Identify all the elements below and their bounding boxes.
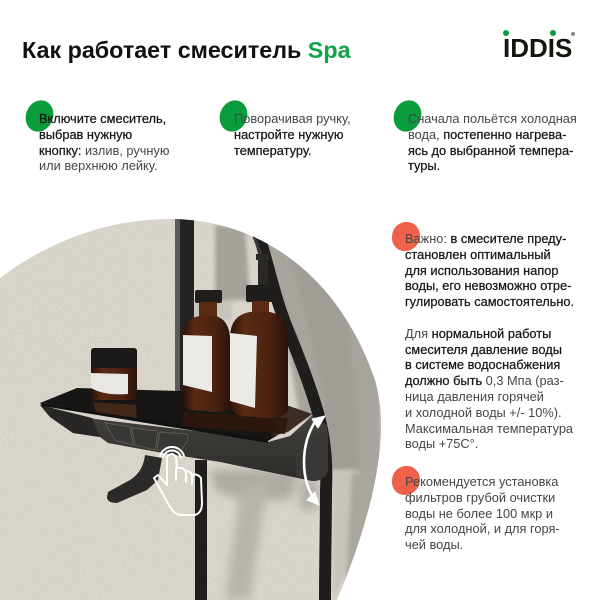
jar — [91, 348, 137, 400]
icon: pressing hand — [154, 447, 202, 515]
text: filters: Рекомендуется установка — [405, 474, 558, 489]
text: important: Максимальная температура — [405, 421, 573, 436]
mixer buttons — [105, 423, 188, 452]
text: filters: чей воды. — [405, 537, 463, 552]
text: important: воды, его невозможно отре- — [405, 278, 571, 293]
marker: green blob — [215, 96, 252, 136]
mixer body — [40, 403, 328, 481]
bottle 2 pump — [246, 260, 272, 302]
step 2 — [220, 100, 351, 158]
text: important: Для нормальной работы — [405, 326, 551, 341]
text: step 3: туры. — [408, 158, 440, 173]
text: important: для использования напор — [405, 263, 559, 278]
marker: green blob — [21, 96, 58, 136]
text: filters: воды не более 100 мкр и — [405, 506, 553, 521]
text: step 3: ясь до выбранной темпера- — [408, 143, 573, 158]
note: important — [392, 222, 574, 451]
text: filters: для холодной, и для горя- — [405, 521, 560, 536]
arrow: handle rotation — [304, 416, 325, 505]
text: important: Важно: в смесителе преду- — [405, 231, 566, 246]
title: Как работает смеситель Spa — [22, 37, 351, 63]
text: important: и холодной воды +/- 10%). — [405, 405, 562, 420]
text: step 1: Включите смеситель, — [39, 111, 166, 126]
text: important: ница давления горячей — [405, 389, 544, 404]
text: important: гулировать самостоятельно. — [405, 294, 574, 309]
photo: shower mixer in a circular crop — [0, 219, 381, 600]
text: step 1: или верхнюю лейку. — [39, 158, 157, 173]
text: important: воды +75С°. — [405, 436, 478, 451]
lower pole — [195, 460, 207, 600]
shelf glass — [40, 388, 312, 441]
text: step 2: Поворачивая ручку, — [234, 111, 351, 126]
text: important: в системе водоснабжения — [405, 357, 560, 372]
text: step 2 — [234, 111, 351, 158]
text: step 3: вода, постепенно нагрева- — [408, 127, 566, 142]
text: filters: фильтров грубой очистки — [405, 490, 555, 505]
text: step 3: Сначала польётся холодная — [408, 111, 577, 126]
step 3 — [394, 100, 577, 173]
text: step 1 — [39, 111, 169, 173]
text: step 1: кнопку: излив, ручную — [39, 143, 169, 158]
marker: red blob — [392, 222, 420, 251]
text: important — [405, 231, 574, 451]
marker: red blob — [392, 466, 420, 495]
logo: IDDIS: IDDIS — [503, 33, 572, 63]
text: important: должно быть 0,3 Мпа (раз- — [405, 373, 564, 388]
bottle 2 — [230, 301, 288, 418]
text: step 1: выбрав нужную — [39, 127, 132, 142]
step 1 — [26, 100, 169, 173]
text: step 3 — [408, 111, 577, 173]
text: important: смесителя давление воды — [405, 342, 562, 357]
marker: green blob — [389, 96, 426, 136]
text: step 2: температуру. — [234, 143, 312, 158]
wall — [0, 210, 400, 600]
text: filters — [405, 474, 560, 552]
spout — [107, 455, 162, 503]
hose — [253, 232, 326, 600]
note: filters — [392, 466, 560, 552]
text: step 2: настройте нужную — [234, 127, 343, 142]
text: important: становлен оптимальный — [405, 247, 551, 262]
upper pole — [175, 219, 194, 409]
bottle 1 — [183, 290, 230, 412]
